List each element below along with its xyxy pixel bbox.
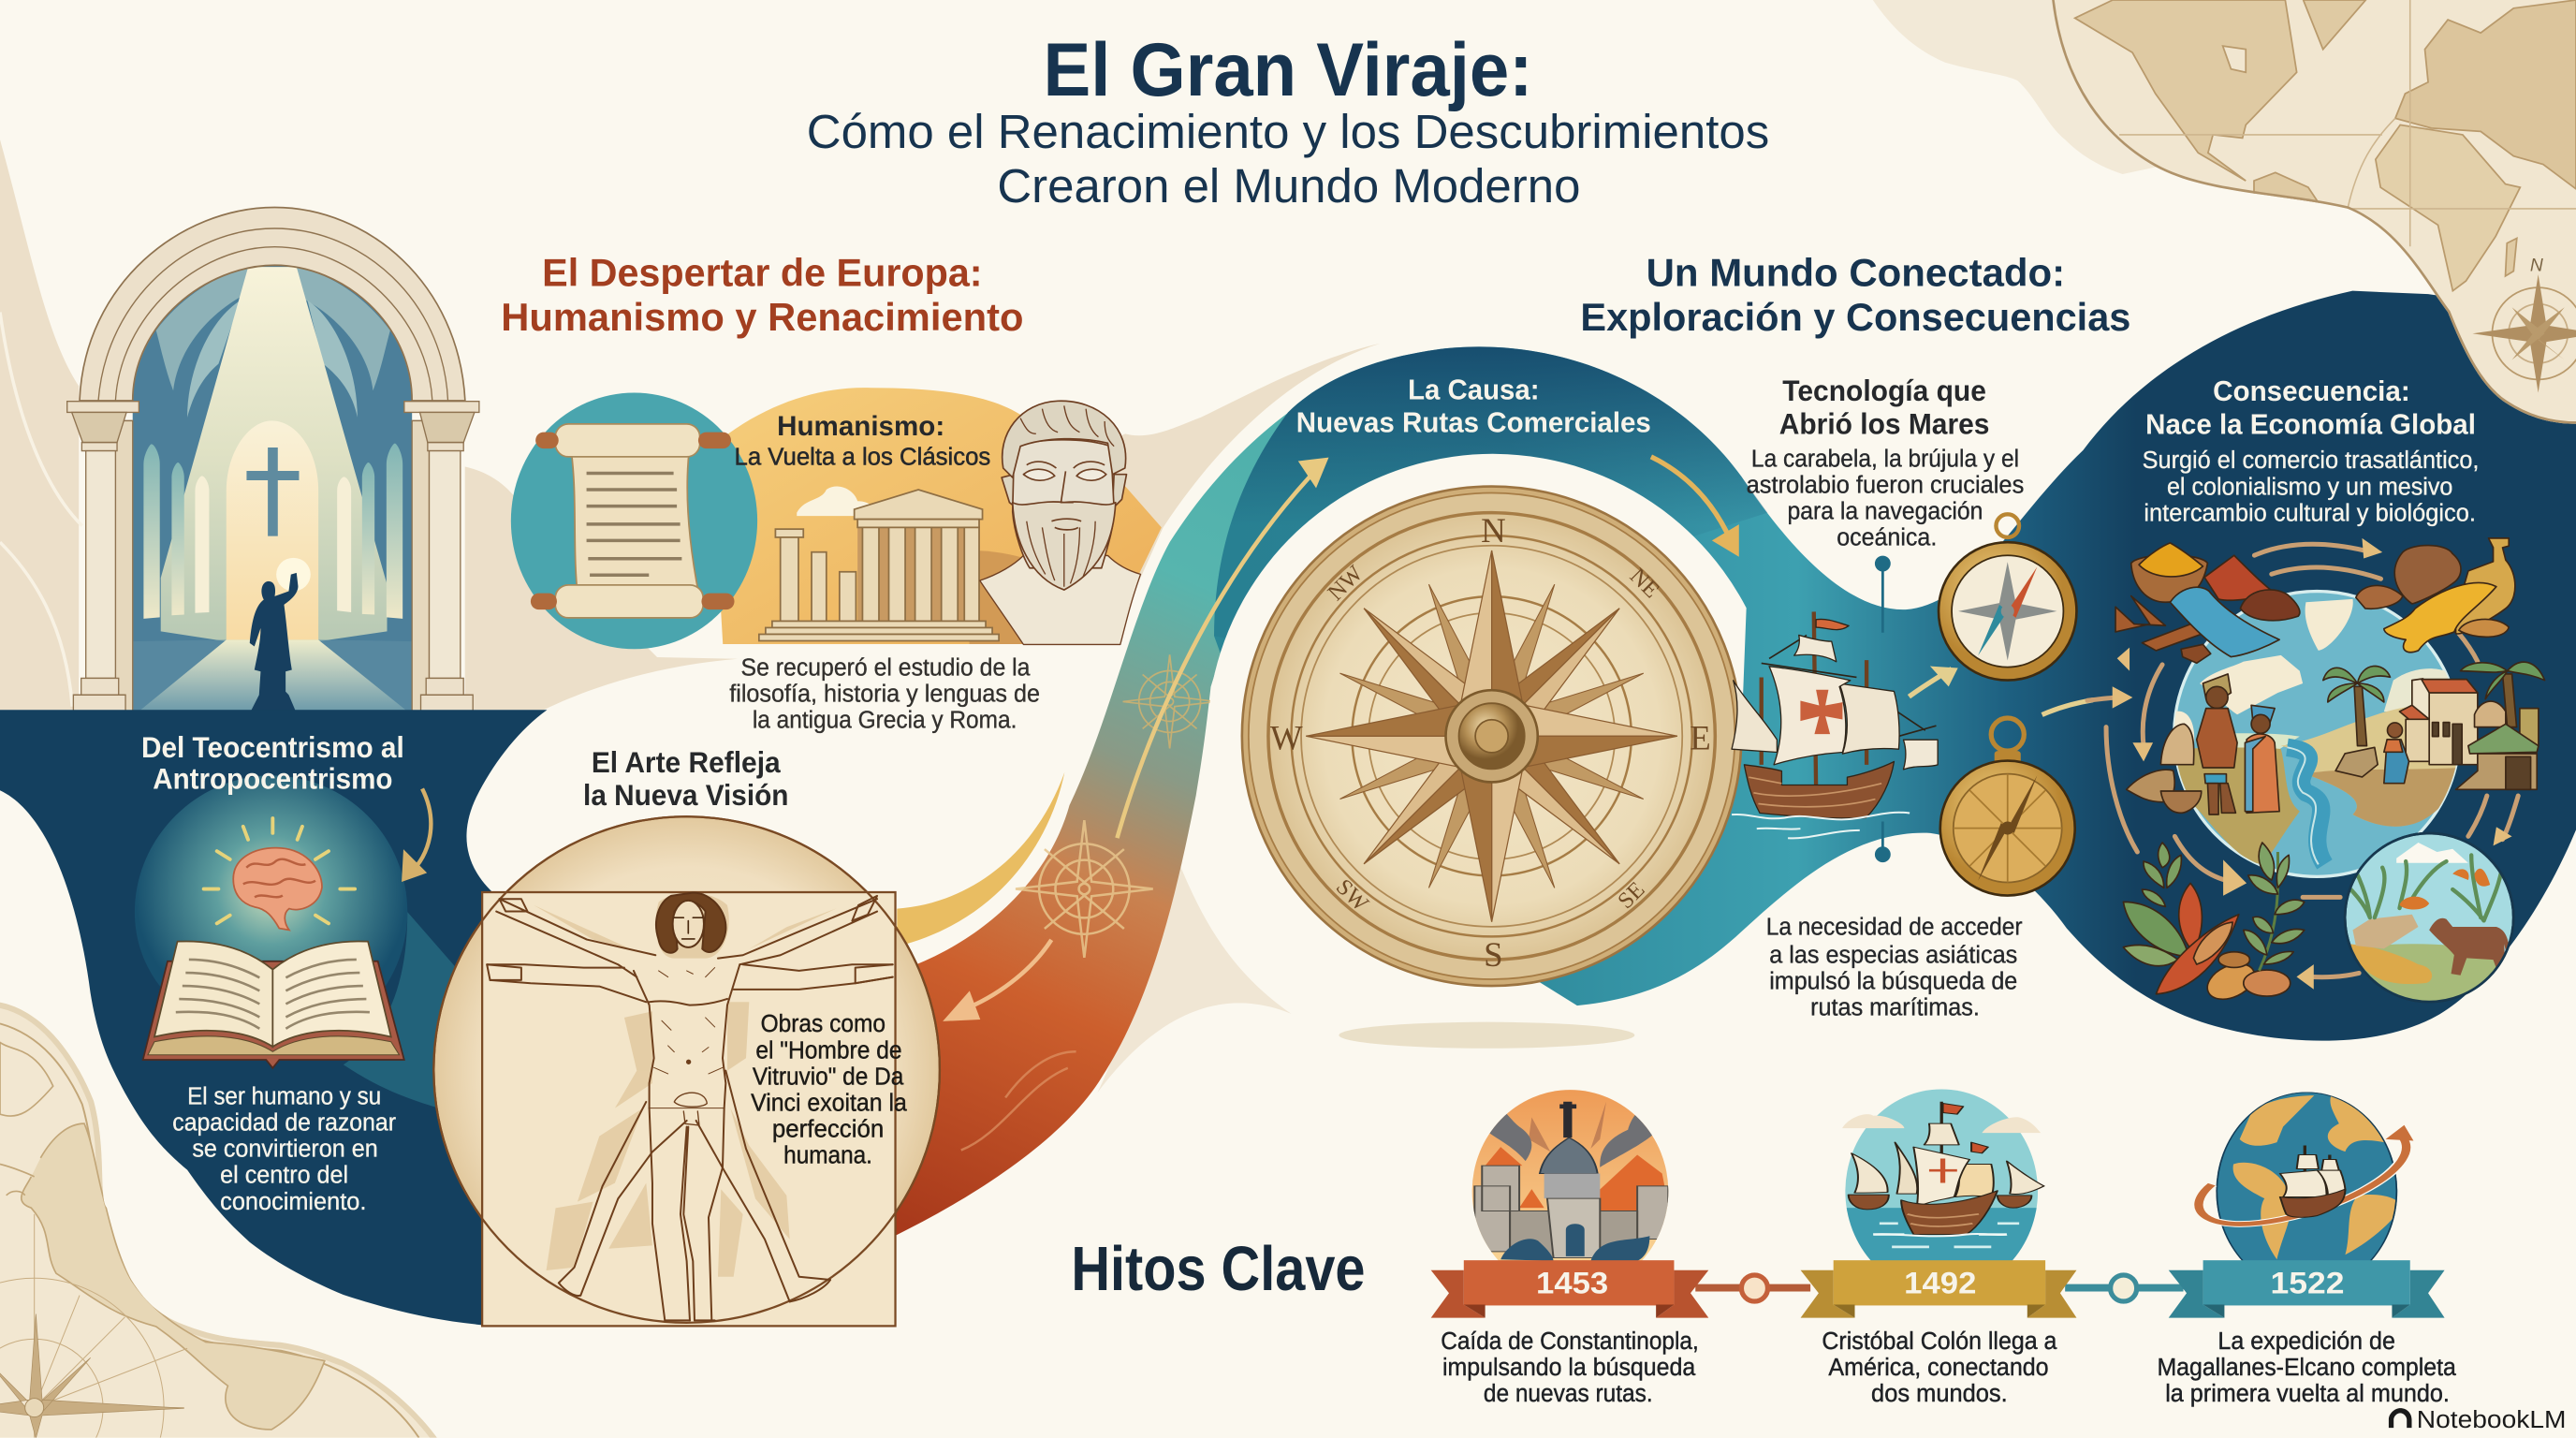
icon: woman near village <box>2384 723 2409 784</box>
text block: global economy: Nace la Economía Global <box>2145 407 2476 440</box>
ribbon: 1492: 1492 <box>1904 1266 1976 1299</box>
decorative left beige swoosh <box>0 139 79 710</box>
text block: spices <box>1766 913 2023 1021</box>
text block: el centro del <box>220 1161 348 1189</box>
heading: art reflects: la Nueva Visión <box>583 778 788 812</box>
text block: technology: astrolabio fueron cruciales <box>1747 471 2024 499</box>
arrows: exchange cycle <box>2087 544 2518 977</box>
heading: Antropocentrismo <box>153 761 392 795</box>
heading: art reflects: El Arte Refleja <box>592 745 781 779</box>
arrows: from ship to compass and to globe <box>1909 668 2093 714</box>
panel: connected world blue band <box>1214 291 2576 1041</box>
ribbon texture lines <box>961 1051 1076 1151</box>
caption: 1453: de nuevas rutas. <box>1484 1379 1653 1407</box>
teal circle <box>511 392 757 649</box>
icon: cross <box>246 448 299 536</box>
icon: palm tree <box>2323 667 2390 777</box>
text block: global economy: el colonialismo y un mesivo <box>2167 472 2452 500</box>
orange to teal ribbon <box>892 363 1377 1238</box>
connector 1492-1522 <box>2065 1275 2184 1301</box>
icon: second palm and hut <box>2456 662 2545 789</box>
door light <box>227 420 318 639</box>
heading: connected world <box>1580 250 2130 339</box>
decorative beige wedge lower centre <box>1097 838 1292 1093</box>
icon: spices and cloth <box>2115 543 2300 663</box>
icon: large compass rose: N <box>1481 511 1506 550</box>
callout lines to compasses <box>1876 557 1889 861</box>
heading: European awakening: Humanismo y Renacimiento <box>501 295 1023 339</box>
icon: pottery and gold goods <box>2356 538 2515 653</box>
compass halo <box>1209 454 1747 736</box>
medallion: world circumnavigation <box>2194 1092 2413 1260</box>
caption: 1522: La expedición de <box>2217 1327 2395 1355</box>
shadow mound behind temple <box>970 550 1076 644</box>
icon: parchment scroll <box>531 424 735 618</box>
figure drawing <box>487 893 893 1320</box>
caption: 1522: la primera vuelta al mundo. <box>2165 1379 2450 1407</box>
icon: large compass rose: W <box>1270 718 1303 756</box>
icon: philosopher bust <box>980 401 1140 644</box>
arrow: gold rising along ribbon <box>1117 459 1327 838</box>
heading: European awakening: El Despertar de Europa: <box>542 250 983 294</box>
caption: 1492: América, conectando <box>1828 1353 2049 1381</box>
text block on drawing: humana. <box>783 1141 872 1169</box>
icon: glowing brain <box>204 818 355 930</box>
text block: conocimiento. <box>220 1187 366 1215</box>
icon: large compass rose: SW <box>1331 874 1374 917</box>
panel: orange exploration ribbon <box>892 363 1377 1238</box>
illustration: globe with cultural exchange <box>2087 538 2545 1006</box>
caption: 1453: Caída de Constantinopla, <box>1441 1327 1699 1355</box>
heading: connected world: Un Mundo Conectado: <box>1647 250 2065 294</box>
text block: global economy: intercambio cultural y biológico. <box>2144 498 2476 526</box>
left column <box>67 402 139 712</box>
heading: key milestones: Hitos Clave <box>1071 1235 1365 1304</box>
icon: map compass rose <box>2472 274 2576 392</box>
hands <box>487 896 893 983</box>
text block: technology: Tecnología que <box>1782 374 1986 407</box>
heading: Del Teocentrismo al <box>141 730 404 764</box>
heading <box>141 730 404 795</box>
text block: technology: para la navegación <box>1788 497 1983 525</box>
heading: the cause <box>1296 373 1651 439</box>
text block: technology: La carabela, la brújula y el <box>1751 444 2019 472</box>
icon: village house <box>2400 679 2478 765</box>
heading: the cause: La Causa: <box>1408 373 1540 405</box>
text block on drawing: el "Hombre de <box>755 1035 902 1064</box>
text block: technology <box>1747 374 2024 551</box>
medallion: Columbus ships <box>1836 1086 2047 1264</box>
text block: Se recuperó el estudio de la <box>741 653 1031 681</box>
icon: navigation compass upper <box>1939 514 2076 681</box>
text block on drawing: perfección <box>772 1115 884 1143</box>
text block: technology: Abrió los Mares <box>1779 406 1989 440</box>
logo: NotebookLM: NotebookLM <box>2417 1405 2566 1433</box>
heading: Humanismo: <box>777 411 944 442</box>
ribbon: 1522: 1522 <box>2271 1266 2345 1299</box>
ribbon: 1453: 1453 <box>1536 1266 1608 1299</box>
straight legs <box>650 1108 724 1320</box>
windows <box>143 444 402 619</box>
caption: 1453: impulsando la búsqueda <box>1442 1353 1696 1381</box>
panel: theocentrism to anthropocentrism <box>0 710 547 1326</box>
connector 1453-1492 <box>1695 1275 1810 1301</box>
timeline <box>1431 1086 2456 1407</box>
icon: gold compass rose on ribbon upper <box>1123 654 1217 748</box>
text block: capacidad de razonar <box>172 1108 396 1137</box>
icon: large compass rose: NW <box>1323 560 1368 606</box>
gold background shape <box>711 388 1162 644</box>
light beam <box>161 267 388 641</box>
text block: spices: impulsó la búsqueda de <box>1769 967 2017 995</box>
icon: silhouette figure <box>250 573 298 713</box>
arrow: returning on orange ribbon <box>944 940 1051 1020</box>
text block on drawing: Vinci exoitan la <box>751 1088 907 1116</box>
text block: El ser humano y su <box>187 1081 381 1109</box>
ribbon: 1522 <box>2169 1260 2445 1318</box>
globe disc <box>2174 592 2460 876</box>
caption: 1492: Cristóbal Colón llega a <box>1822 1327 2057 1355</box>
icon: two people <box>2197 674 2279 814</box>
icon: cloud <box>797 486 877 516</box>
floor <box>140 639 406 710</box>
icon: large compass rose: S <box>1484 935 1503 974</box>
decorative corner: top right pale swoosh <box>1873 0 2169 174</box>
decorative beige band behind the scroll <box>465 466 738 710</box>
torso <box>634 964 739 1108</box>
medallion: fall of Constantinople <box>1471 1090 1668 1260</box>
arch vault interior <box>133 265 412 713</box>
ribbon: 1453 <box>1431 1260 1708 1318</box>
icon: navigation astrolabe lower <box>1940 718 2075 896</box>
decorative beige band behind the bust <box>986 344 1380 644</box>
title: Crearon el Mundo Moderno <box>997 159 1580 213</box>
compass shadow <box>1339 1022 1634 1049</box>
arch rings <box>80 208 465 401</box>
text block: la antigua Grecia y Roma. <box>753 706 1017 734</box>
icon: rocks and bowl <box>2127 724 2202 813</box>
spread legs <box>559 1071 830 1301</box>
icon: landscape medallion with animal <box>2337 833 2518 1005</box>
arrow and rose details on ribbon <box>944 459 1327 1020</box>
icon: leaves and nuts <box>2123 843 2305 1006</box>
icon: temple ruins <box>759 490 999 640</box>
caption: 1453 <box>1441 1327 1699 1407</box>
compass rose on map <box>0 1214 187 1438</box>
title: El Gran Viraje: <box>1043 28 1533 112</box>
text block <box>172 1081 396 1215</box>
illustration: classical arch with figure <box>67 208 479 713</box>
teal glow behind brain <box>135 775 407 1049</box>
heading <box>735 411 990 471</box>
text block on drawing: Vitruvio" de Da <box>753 1062 904 1090</box>
text block: global economy <box>2143 374 2479 526</box>
text block on drawing <box>751 1009 907 1169</box>
icon: gold compass rose on ribbon lower <box>1016 820 1153 958</box>
text block: global economy: Consecuencia: <box>2213 374 2410 407</box>
arms horizontal <box>487 964 893 1002</box>
heading: art reflects <box>583 745 788 812</box>
arrow: gold along blue band <box>1651 457 1738 555</box>
panel: humanism <box>511 388 1162 734</box>
feet <box>559 1280 830 1320</box>
caption: 1492 <box>1822 1327 2057 1407</box>
text block: filosofía, historia y lenguas de <box>729 679 1040 707</box>
text block: technology: oceánica. <box>1837 523 1937 551</box>
gold ribbon <box>897 772 1064 946</box>
map: bottom left corner <box>0 986 444 1438</box>
ribbon: 1492 <box>1801 1260 2076 1318</box>
hair and face <box>656 893 725 953</box>
text block: spices: La necesidad de acceder <box>1766 913 2023 941</box>
text block <box>729 653 1040 734</box>
map: top right corner: N <box>2530 257 2543 276</box>
heading: connected world: Exploración y Consecuencias <box>1580 295 2130 339</box>
icon: large compass rose: NE <box>1625 564 1664 603</box>
right column <box>404 402 479 712</box>
icon: large compass rose: SE <box>1613 877 1649 914</box>
continent strip <box>22 1123 325 1430</box>
text block: spices: rutas marítimas. <box>1810 993 1980 1021</box>
icon: large compass rose <box>1242 487 1741 986</box>
heading: La Vuelta a los Clásicos <box>735 443 990 471</box>
heading: European awakening <box>501 250 1023 339</box>
text block on drawing: Obras como <box>761 1009 886 1037</box>
caption: 1522 <box>2157 1327 2456 1407</box>
text block: global economy: Surgió el comercio trasatlántico, <box>2143 446 2479 474</box>
heading: the cause: Nuevas Rutas Comerciales <box>1296 406 1651 439</box>
icon: large compass rose: E <box>1690 718 1711 756</box>
caption: 1522: Magallanes-Elcano completa <box>2157 1353 2456 1381</box>
title <box>807 28 1769 213</box>
title: Cómo el Renacimiento y los Descubrimientos <box>807 105 1769 158</box>
caption: 1492: dos mundos. <box>1871 1379 2008 1407</box>
text block: se convirtieron en <box>192 1135 378 1163</box>
icon: caravel ship <box>1732 611 1938 838</box>
arms raised <box>496 899 877 977</box>
arrow: gold curve <box>402 788 431 881</box>
icon: open book <box>143 941 404 1068</box>
map: top right corner <box>2037 0 2576 427</box>
illustration: Vitruvian Man <box>433 816 940 1326</box>
text block: spices: a las especias asiáticas <box>1769 940 2017 968</box>
